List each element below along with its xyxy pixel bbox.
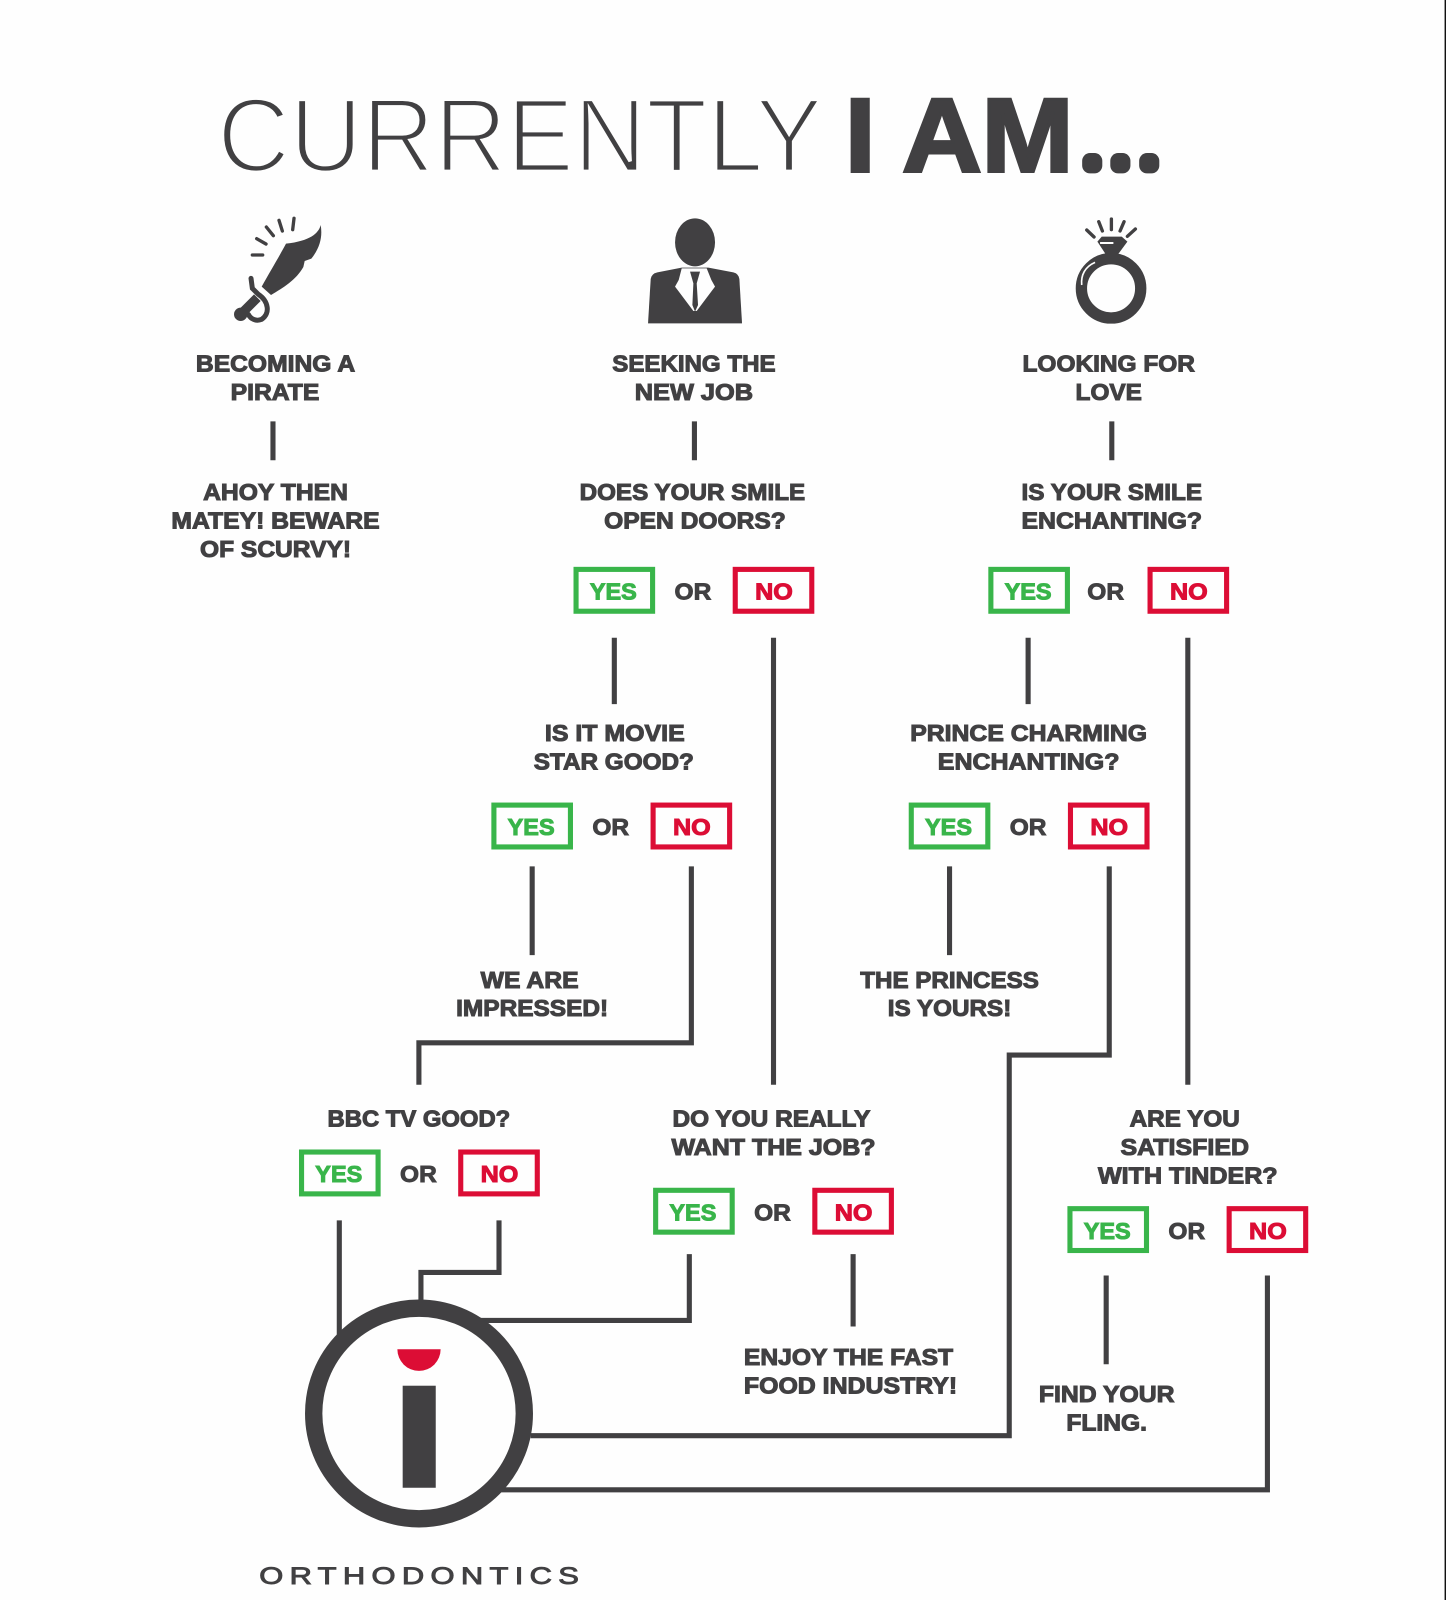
text: prince charming enchanting: PRINCE CHARMING [910, 720, 1147, 746]
choice: want the job yes or no: YES [669, 1199, 716, 1225]
text: find your fling: FIND YOUR [1039, 1381, 1175, 1407]
choice: movie star yes or no: NO [673, 814, 711, 840]
choice: enchanting yes or no: YES [1005, 578, 1052, 604]
icon: diamond ring [1081, 219, 1141, 318]
choice: open doors yes or no: OR [675, 578, 711, 604]
text: the princess is yours [860, 967, 1039, 1021]
heading: becoming a pirate: PIRATE [231, 379, 319, 405]
heading: looking for love: LOOKING FOR [1023, 350, 1195, 376]
choice: want the job yes or no [656, 1190, 891, 1232]
text: bbc tv good: BBC TV GOOD? [328, 1106, 510, 1132]
choice: want the job yes or no: NO [835, 1199, 872, 1225]
title [217, 77, 1153, 194]
text: enjoy the fast food industry: ENJOY THE FAST [744, 1344, 953, 1370]
title: ... [1088, 138, 1153, 172]
text: are you satisfied with tinder: ARE YOU [1130, 1106, 1240, 1132]
arrow: third row connectors [419, 866, 1109, 1436]
choice: tinder yes or no: YES [1084, 1218, 1131, 1244]
heading: seeking the new job: NEW JOB [635, 379, 753, 405]
heading: seeking the new job: SEEKING THE [612, 350, 776, 376]
choice: prince charming yes or no: NO [1090, 814, 1128, 840]
text: find your fling [1039, 1381, 1175, 1436]
choice: tinder yes or no [1070, 1209, 1306, 1251]
text: is your smile enchanting: ENCHANTING? [1021, 508, 1202, 534]
arrow: top connectors [273, 421, 1112, 460]
icon: pirate sword [234, 218, 321, 321]
choice: enchanting yes or no: NO [1170, 578, 1208, 604]
title: CURRENTLY [217, 77, 822, 194]
text: are you satisfied with tinder: WITH TINDER? [1098, 1163, 1278, 1189]
heading: looking for love [1023, 350, 1195, 405]
text: find your fling: FLING. [1066, 1410, 1147, 1436]
choice: bbc tv yes or no: YES [315, 1161, 362, 1187]
choice: movie star yes or no [494, 805, 730, 847]
text: are you satisfied with tinder: SATISFIED [1120, 1134, 1249, 1160]
text: does your smile open doors: OPEN DOORS? [604, 508, 786, 534]
choice: prince charming yes or no: YES [925, 814, 972, 840]
text: the princess is yours: THE PRINCESS [860, 967, 1039, 993]
arrow: bottom connectors [339, 1220, 1267, 1490]
logo wordmark: ORTHODONTICS [259, 1563, 579, 1589]
choice: bbc tv yes or no: NO [481, 1161, 518, 1187]
choice: prince charming yes or no [911, 805, 1147, 847]
text: enjoy the fast food industry: FOOD INDUSTRY! [744, 1372, 957, 1398]
choice: movie star yes or no: YES [508, 814, 555, 840]
heading: becoming a pirate [196, 350, 355, 405]
text: the princess is yours: IS YOURS! [888, 995, 1011, 1021]
arrow: second row connectors [614, 638, 1188, 1085]
choice: prince charming yes or no: OR [1010, 814, 1047, 840]
text: we are impressed: IMPRESSED! [456, 995, 608, 1021]
text: is it movie star good: IS IT MOVIE [545, 720, 685, 746]
choice: want the job yes or no: OR [754, 1199, 791, 1225]
heading: seeking the new job [612, 350, 776, 405]
text: is your smile enchanting [1021, 479, 1202, 534]
heading: becoming a pirate: BECOMING A [196, 350, 355, 376]
icon: businessman [648, 218, 742, 323]
choice: open doors yes or no: NO [755, 578, 793, 604]
logo: i orthodontics circle [314, 1308, 524, 1519]
choice: enchanting yes or no [991, 569, 1227, 611]
choice: open doors yes or no: YES [590, 578, 637, 604]
text: ahoy then matey: OF SCURVY! [200, 536, 351, 562]
text: prince charming enchanting: ENCHANTING? [938, 748, 1119, 774]
text: we are impressed: WE ARE [481, 967, 579, 993]
text: is it movie star good: STAR GOOD? [534, 748, 694, 774]
text: do you really want the job: WANT THE JOB? [671, 1134, 876, 1160]
text: is your smile enchanting: IS YOUR SMILE [1021, 479, 1202, 505]
text: is it movie star good [534, 720, 694, 774]
text: enjoy the fast food industry [744, 1344, 957, 1398]
choice: open doors yes or no [576, 569, 812, 611]
text: we are impressed [456, 967, 608, 1021]
choice: enchanting yes or no: OR [1087, 578, 1124, 604]
title: I AM [845, 77, 1074, 194]
text: do you really want the job [671, 1106, 876, 1160]
text: are you satisfied with tinder [1098, 1106, 1278, 1189]
text: ahoy then matey [171, 479, 380, 562]
choice: movie star yes or no: OR [592, 814, 629, 840]
text: does your smile open doors [580, 479, 805, 534]
choice: bbc tv yes or no [302, 1152, 537, 1194]
choice: bbc tv yes or no: OR [400, 1161, 437, 1187]
text: do you really want the job: DO YOU REALLY [672, 1106, 870, 1132]
choice: tinder yes or no: OR [1168, 1218, 1205, 1244]
text: does your smile open doors: DOES YOUR SMILE [580, 479, 805, 505]
text: ahoy then matey: AHOY THEN [203, 479, 348, 505]
choice: tinder yes or no: NO [1249, 1218, 1287, 1244]
text: prince charming enchanting [910, 720, 1147, 774]
text: ahoy then matey: MATEY! BEWARE [171, 508, 380, 534]
heading: looking for love: LOVE [1076, 379, 1142, 405]
